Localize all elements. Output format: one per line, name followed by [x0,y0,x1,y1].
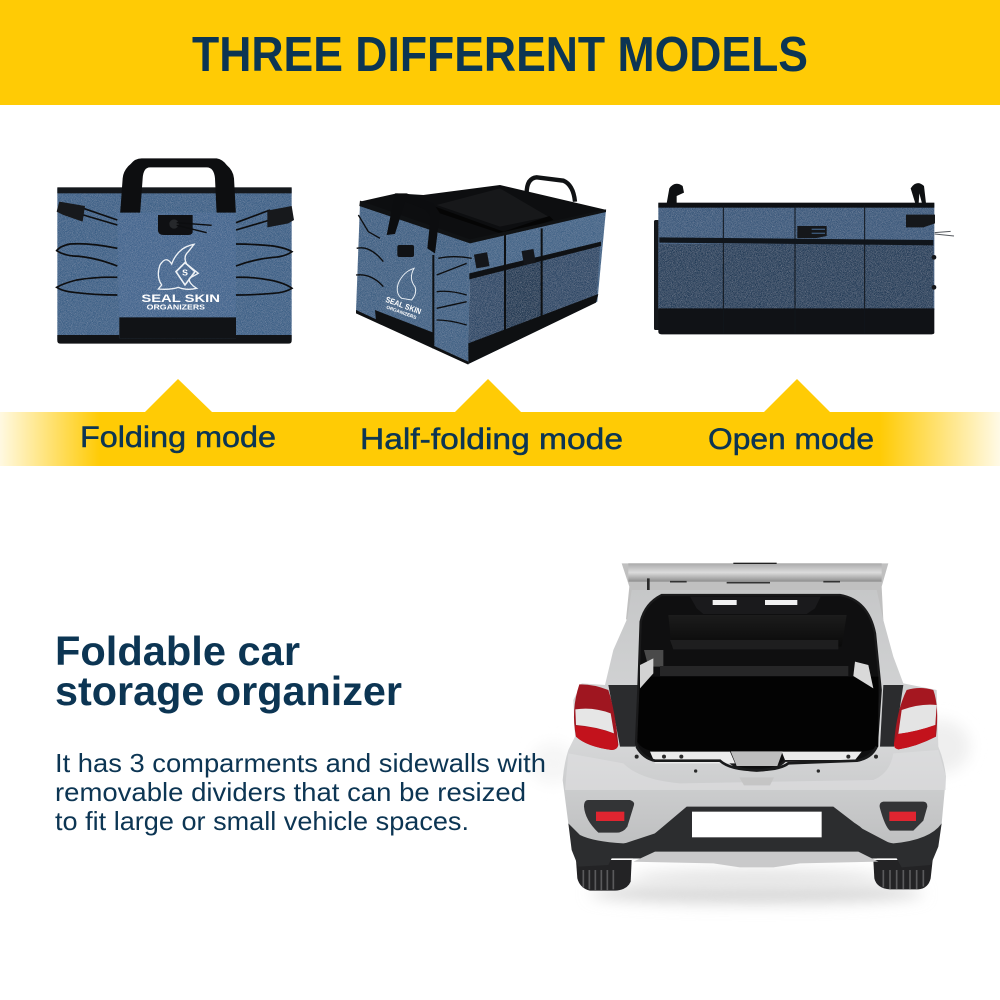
ground shadow [530,720,970,903]
heading: storage organizer [55,668,402,714]
pointer: folding mode [145,379,212,412]
brand logo: S [182,267,188,277]
side trim [640,658,653,688]
handle [120,158,236,215]
label: half-folding mode: Half-folding mode [360,423,623,456]
bottom band [658,308,934,334]
yellow label band [0,379,1000,466]
body text: to fit large or small vehicle spaces. [55,806,469,836]
bottom bands [468,294,598,364]
dark pillars by lights [608,685,903,747]
lower pockets [659,244,933,309]
pointer: half-folding mode [455,379,521,412]
top binding [658,203,934,208]
side mesh [654,220,659,330]
brand logo: SEAL SKIN [384,295,423,316]
car rear with open trunk [530,563,970,903]
front handle [387,193,440,253]
brand logo: SEAL SKIN [141,293,220,305]
trunk opening [636,595,881,771]
cords and buckles [356,215,472,325]
sill plate [637,747,877,770]
body text: removable dividers that can be resized [55,777,526,807]
label: folding mode: Folding mode [80,421,276,454]
fog reflector: right [880,802,927,831]
fog reflector: left [584,800,634,833]
buckles [797,226,827,238]
right face [468,210,606,364]
taillight: left [574,684,618,750]
flap closure [158,215,193,235]
body text: It has 3 comparments and sidewalls with [55,748,546,778]
front flap [117,213,236,338]
brand logo [141,244,220,312]
silver skid plate [633,852,878,867]
parcel shelf [644,597,848,676]
bumper highlight and latch [565,750,946,790]
pointer: open mode [764,379,830,412]
top rim [359,201,606,243]
end handles [667,184,684,203]
product: open mode organizer [654,183,954,334]
elastic cords [57,208,292,295]
brand logo: ORGANIZERS [386,305,417,320]
heading: Foldable car [55,628,300,674]
product: half-folding mode organizer [356,177,607,365]
strap [469,242,601,279]
seams [723,205,865,333]
number plate [692,812,822,837]
lower mesh pockets [468,245,600,345]
taillight: right [894,688,937,749]
painted body [563,590,946,843]
title banner [0,0,1000,105]
seams [433,228,542,348]
tires [576,860,933,891]
left face [356,203,470,364]
buckles [57,202,85,222]
heading [55,628,402,714]
product: folding mode organizer [57,158,294,344]
number plate recess [620,807,893,860]
interior [360,185,607,240]
title: THREE DIFFERENT MODELS [192,28,808,82]
open tailgate [622,563,888,620]
brand logo: ORGANIZERS [147,305,205,312]
trunk floor [637,677,878,752]
body [658,203,934,310]
body text [55,748,546,836]
back handle [527,177,575,202]
lower black bumper and mud flaps [568,823,942,867]
label: open mode: Open mode [708,423,874,456]
brand logo [384,268,423,320]
strap [659,237,933,245]
cord ends [935,231,954,236]
